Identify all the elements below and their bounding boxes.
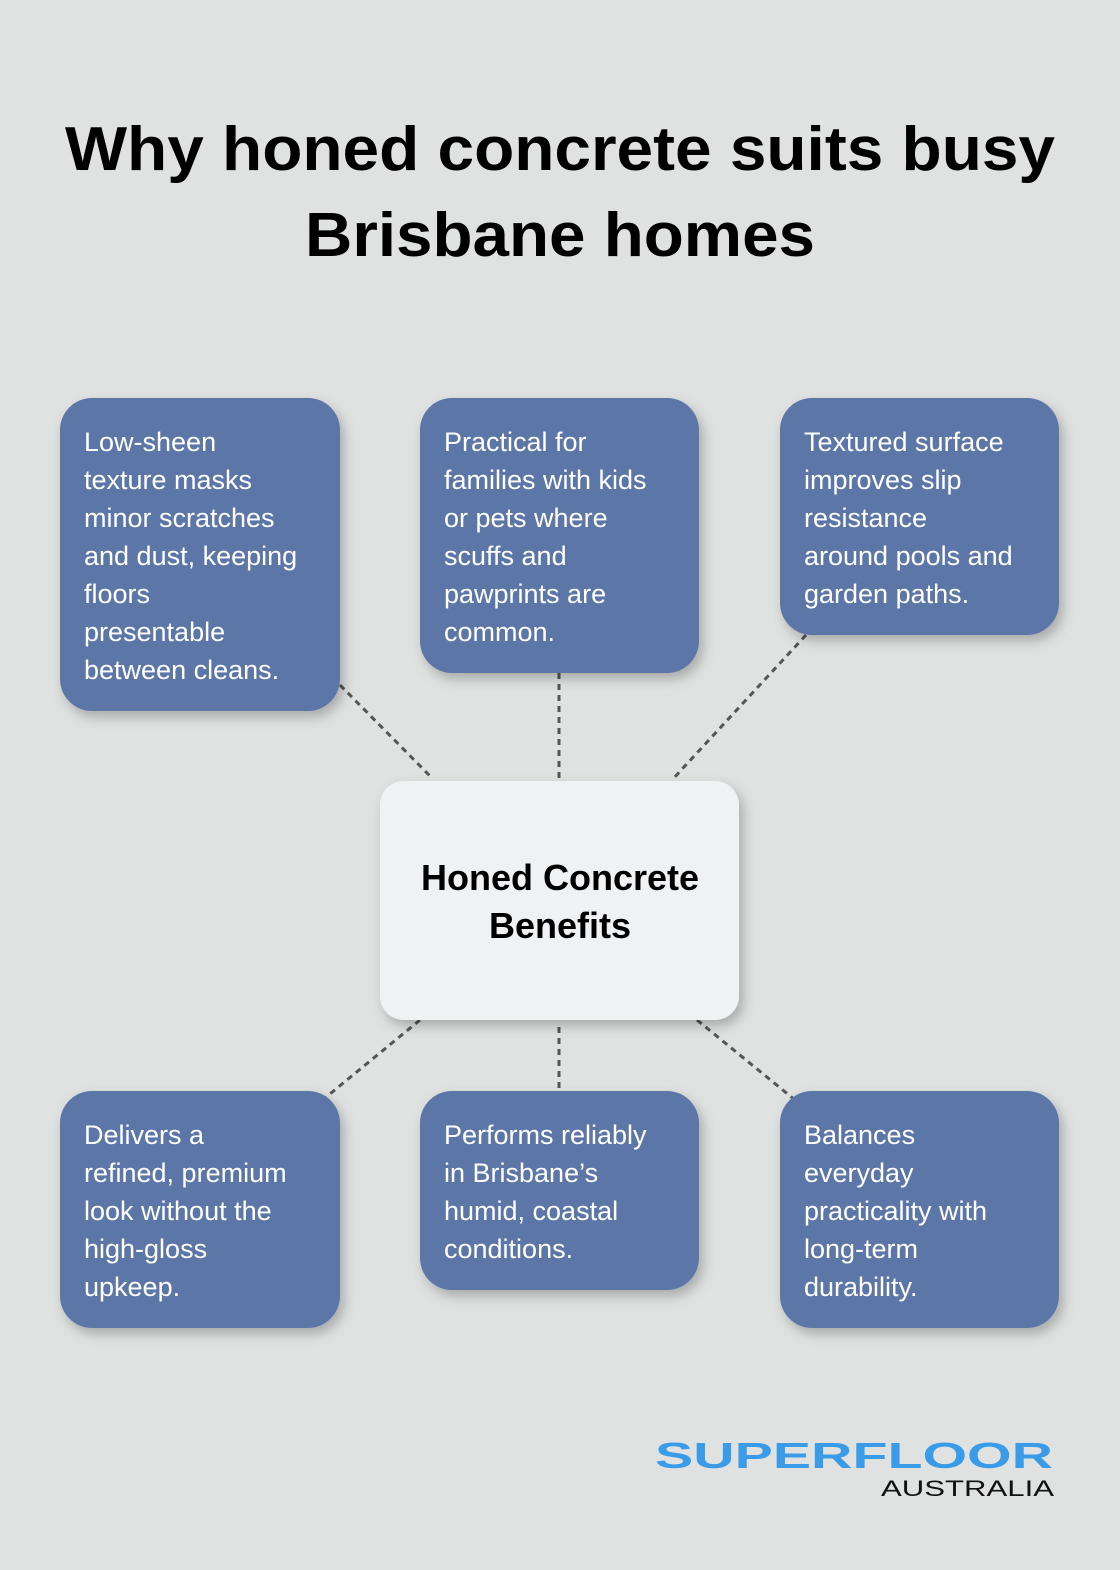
- panel: families: Practical for: [444, 427, 587, 457]
- title: Why honed concrete suits busy: [65, 115, 1056, 184]
- panel: durability: everyday: [804, 1158, 914, 1188]
- center node: Honed Concrete: [421, 857, 699, 898]
- panel: premium look: look without the: [84, 1196, 272, 1226]
- panel: durability: practicality with: [804, 1196, 987, 1226]
- panel: durability: [780, 1091, 1059, 1328]
- panel: families: common.: [444, 617, 555, 647]
- panel: families: or pets where: [444, 503, 608, 533]
- panel: families: families with kids: [444, 465, 647, 495]
- panel: durability: durability.: [804, 1272, 918, 1302]
- panel: families: scuffs and: [444, 541, 567, 571]
- panel: low-sheen: between cleans.: [84, 655, 279, 685]
- panel: slip resistance: [780, 398, 1059, 635]
- panel: low-sheen: presentable: [84, 617, 225, 647]
- panel: premium look: [60, 1091, 340, 1328]
- panel: premium look: upkeep.: [84, 1272, 180, 1302]
- title: [65, 115, 1056, 270]
- panel: premium look: Delivers a: [84, 1120, 205, 1150]
- panel: slip resistance: resistance: [804, 503, 927, 533]
- panel: low-sheen: [60, 398, 340, 711]
- panel: slip resistance: Textured surface: [804, 427, 1004, 457]
- panel: humid conditions: humid, coastal: [444, 1196, 618, 1226]
- panel: low-sheen: floors: [84, 579, 150, 609]
- panel: low-sheen: and dust, keeping: [84, 541, 297, 571]
- panel: slip resistance: around pools and: [804, 541, 1013, 571]
- logo: AUSTRALIA: [881, 1476, 1054, 1501]
- panel: slip resistance: improves slip: [804, 465, 962, 495]
- logo: [655, 1435, 1054, 1501]
- panel: low-sheen: Low-sheen: [84, 427, 216, 457]
- panel: families: pawprints are: [444, 579, 606, 609]
- logo: SUPERFLOOR: [655, 1435, 1053, 1476]
- panel: slip resistance: garden paths.: [804, 579, 969, 609]
- panel: families: [420, 398, 699, 673]
- panel: low-sheen: texture masks: [84, 465, 252, 495]
- center node: Benefits: [489, 905, 631, 946]
- connector lines: [325, 635, 806, 1100]
- panel: premium look: high-gloss: [84, 1234, 207, 1264]
- panel: humid conditions: [420, 1091, 699, 1290]
- title: Brisbane homes: [305, 201, 815, 270]
- panel: low-sheen: minor scratches: [84, 503, 275, 533]
- panel: durability: Balances: [804, 1120, 915, 1150]
- panel: durability: long-term: [804, 1234, 918, 1264]
- center node: [380, 781, 739, 1020]
- panel: humid conditions: in Brisbane’s: [444, 1158, 598, 1188]
- panel: humid conditions: Performs reliably: [444, 1120, 647, 1150]
- panel: humid conditions: conditions.: [444, 1234, 573, 1264]
- panel: premium look: refined, premium: [84, 1158, 287, 1188]
